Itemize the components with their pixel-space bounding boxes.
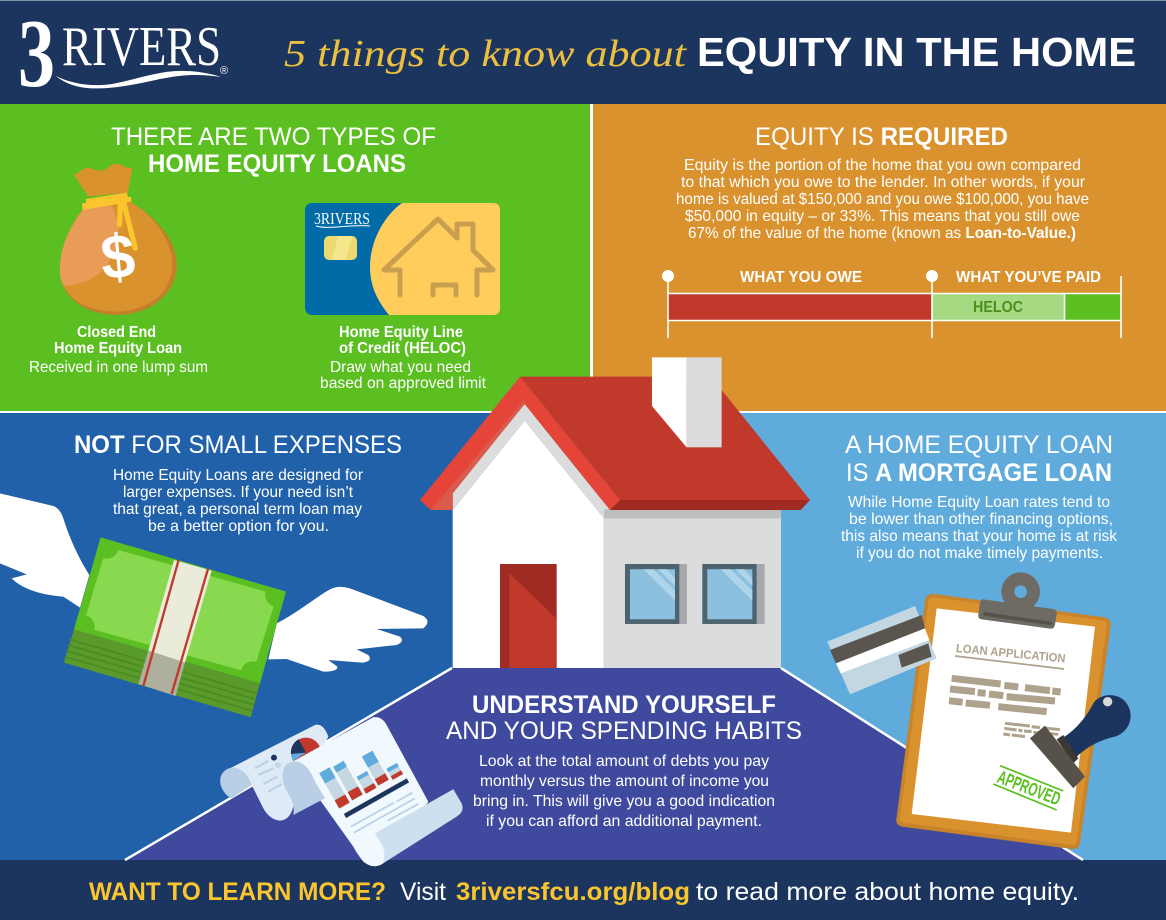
body text: if you can afford an additional payment. [486,813,762,830]
body text: this also means that your home is at risk [841,528,1118,545]
heading: NOT FOR SMALL EXPENSES [74,431,402,459]
panel: a home equity loan is a mortgage loan [600,413,1166,860]
icon: money bag: $ [98,222,138,293]
house walls [453,404,781,668]
panel: not for small expenses [0,413,600,860]
body text: if you do not make timely payments. [856,545,1103,562]
heading: THERE ARE TWO TYPES OF [111,123,436,151]
footer bar: Visit [400,878,446,906]
heading: UNDERSTAND YOURSELF [472,691,776,719]
divider background [0,104,1166,414]
label: closed end home equity loan: Received in one lump sum [29,359,208,376]
label: home equity line of credit: of Credit (HELOC) [339,340,466,357]
label: home equity line of credit [320,324,487,392]
icon: financial documents [220,717,463,866]
heading: A HOME EQUITY LOAN [845,431,1113,459]
body text: to that which you owe to the lender. In other words, if your [681,174,1086,191]
bar chart: what you owe vs paid: HELOC [973,299,1023,316]
body text: Home Equity Loans are designed for [113,467,364,484]
footer bar: 3riversfcu.org/blog [456,878,690,906]
heading: EQUITY IS REQUIRED [755,123,1008,151]
body text: larger expenses. If your need isn’t [123,484,354,501]
heading [446,691,802,745]
body text: Look at the total amount of debts you pay [479,753,769,770]
body text: that great, a personal term loan may [113,501,362,518]
label: home equity line of credit: Draw what you need [330,359,471,376]
bar chart: what you owe vs paid [662,269,1121,338]
icon: clipboard loan application [827,572,1131,849]
body text [676,157,1089,242]
label: closed end home equity loan [29,324,208,376]
heading [111,123,436,178]
body text: While Home Equity Loan rates tend to [848,494,1110,511]
footer bar [0,860,1166,920]
logo: ® [220,65,228,77]
icon: credit card with house: 3RIVERS [314,209,370,228]
footer bar: to read more about home equity. [696,878,1079,906]
heading: HOME EQUITY LOANS [148,150,406,178]
label: closed end home equity loan: Home Equity Loan [54,340,182,357]
panel: understand yourself [125,668,1083,866]
body text: bring in. This will give you a good indication [473,793,775,810]
panel: two types of home equity loans [0,104,590,411]
body text [841,494,1118,562]
body text: Equity is the portion of the home that you own compared [684,157,1081,174]
body text: $50,000 in equity – or 33%. This means that you still owe [685,208,1080,225]
door [500,564,557,668]
title: 5 things to know about [284,33,688,75]
title [284,29,1136,75]
icon: clipboard loan application: APPROVED [995,766,1064,809]
panel: equity is required [593,104,1166,411]
heading: AND YOUR SPENDING HABITS [446,717,802,745]
body text: home is valued at $150,000 and you owe $100,000, you have [676,191,1089,208]
heading: IS A MORTGAGE LOAN [846,459,1112,487]
bar chart: what you owe vs paid: WHAT YOU OWE [740,269,862,286]
bar chart: what you owe vs paid: WHAT YOU’VE PAID [956,269,1101,286]
logo: 3 [18,0,55,108]
logo: RIVERS [62,16,221,78]
title: EQUITY IN THE HOME [697,29,1136,75]
body text [473,753,775,830]
icon: credit card with house [305,203,500,315]
header band [0,0,1166,108]
heading [845,431,1113,487]
body text [113,467,364,535]
icon: clipboard loan application: LOAN APPLICATION [955,641,1066,666]
body text: be a better option for you. [148,518,329,535]
label: closed end home equity loan: Closed End [77,324,156,341]
icon: flying money [0,493,427,717]
icon: money bag [60,164,177,315]
label: home equity line of credit: based on approved limit [320,375,487,392]
body text: monthly versus the amount of income you [480,773,769,790]
footer bar: WANT TO LEARN MORE? [89,878,386,906]
windows [625,564,765,624]
illustration: house [420,357,810,668]
body text: be lower than other financing options, [849,511,1113,528]
body text: 67% of the value of the home (known as Loan-to-Value.) [688,225,1076,242]
roof [420,377,810,510]
label: home equity line of credit: Home Equity Line [339,324,463,341]
logo [18,0,228,108]
chimney [652,357,722,447]
